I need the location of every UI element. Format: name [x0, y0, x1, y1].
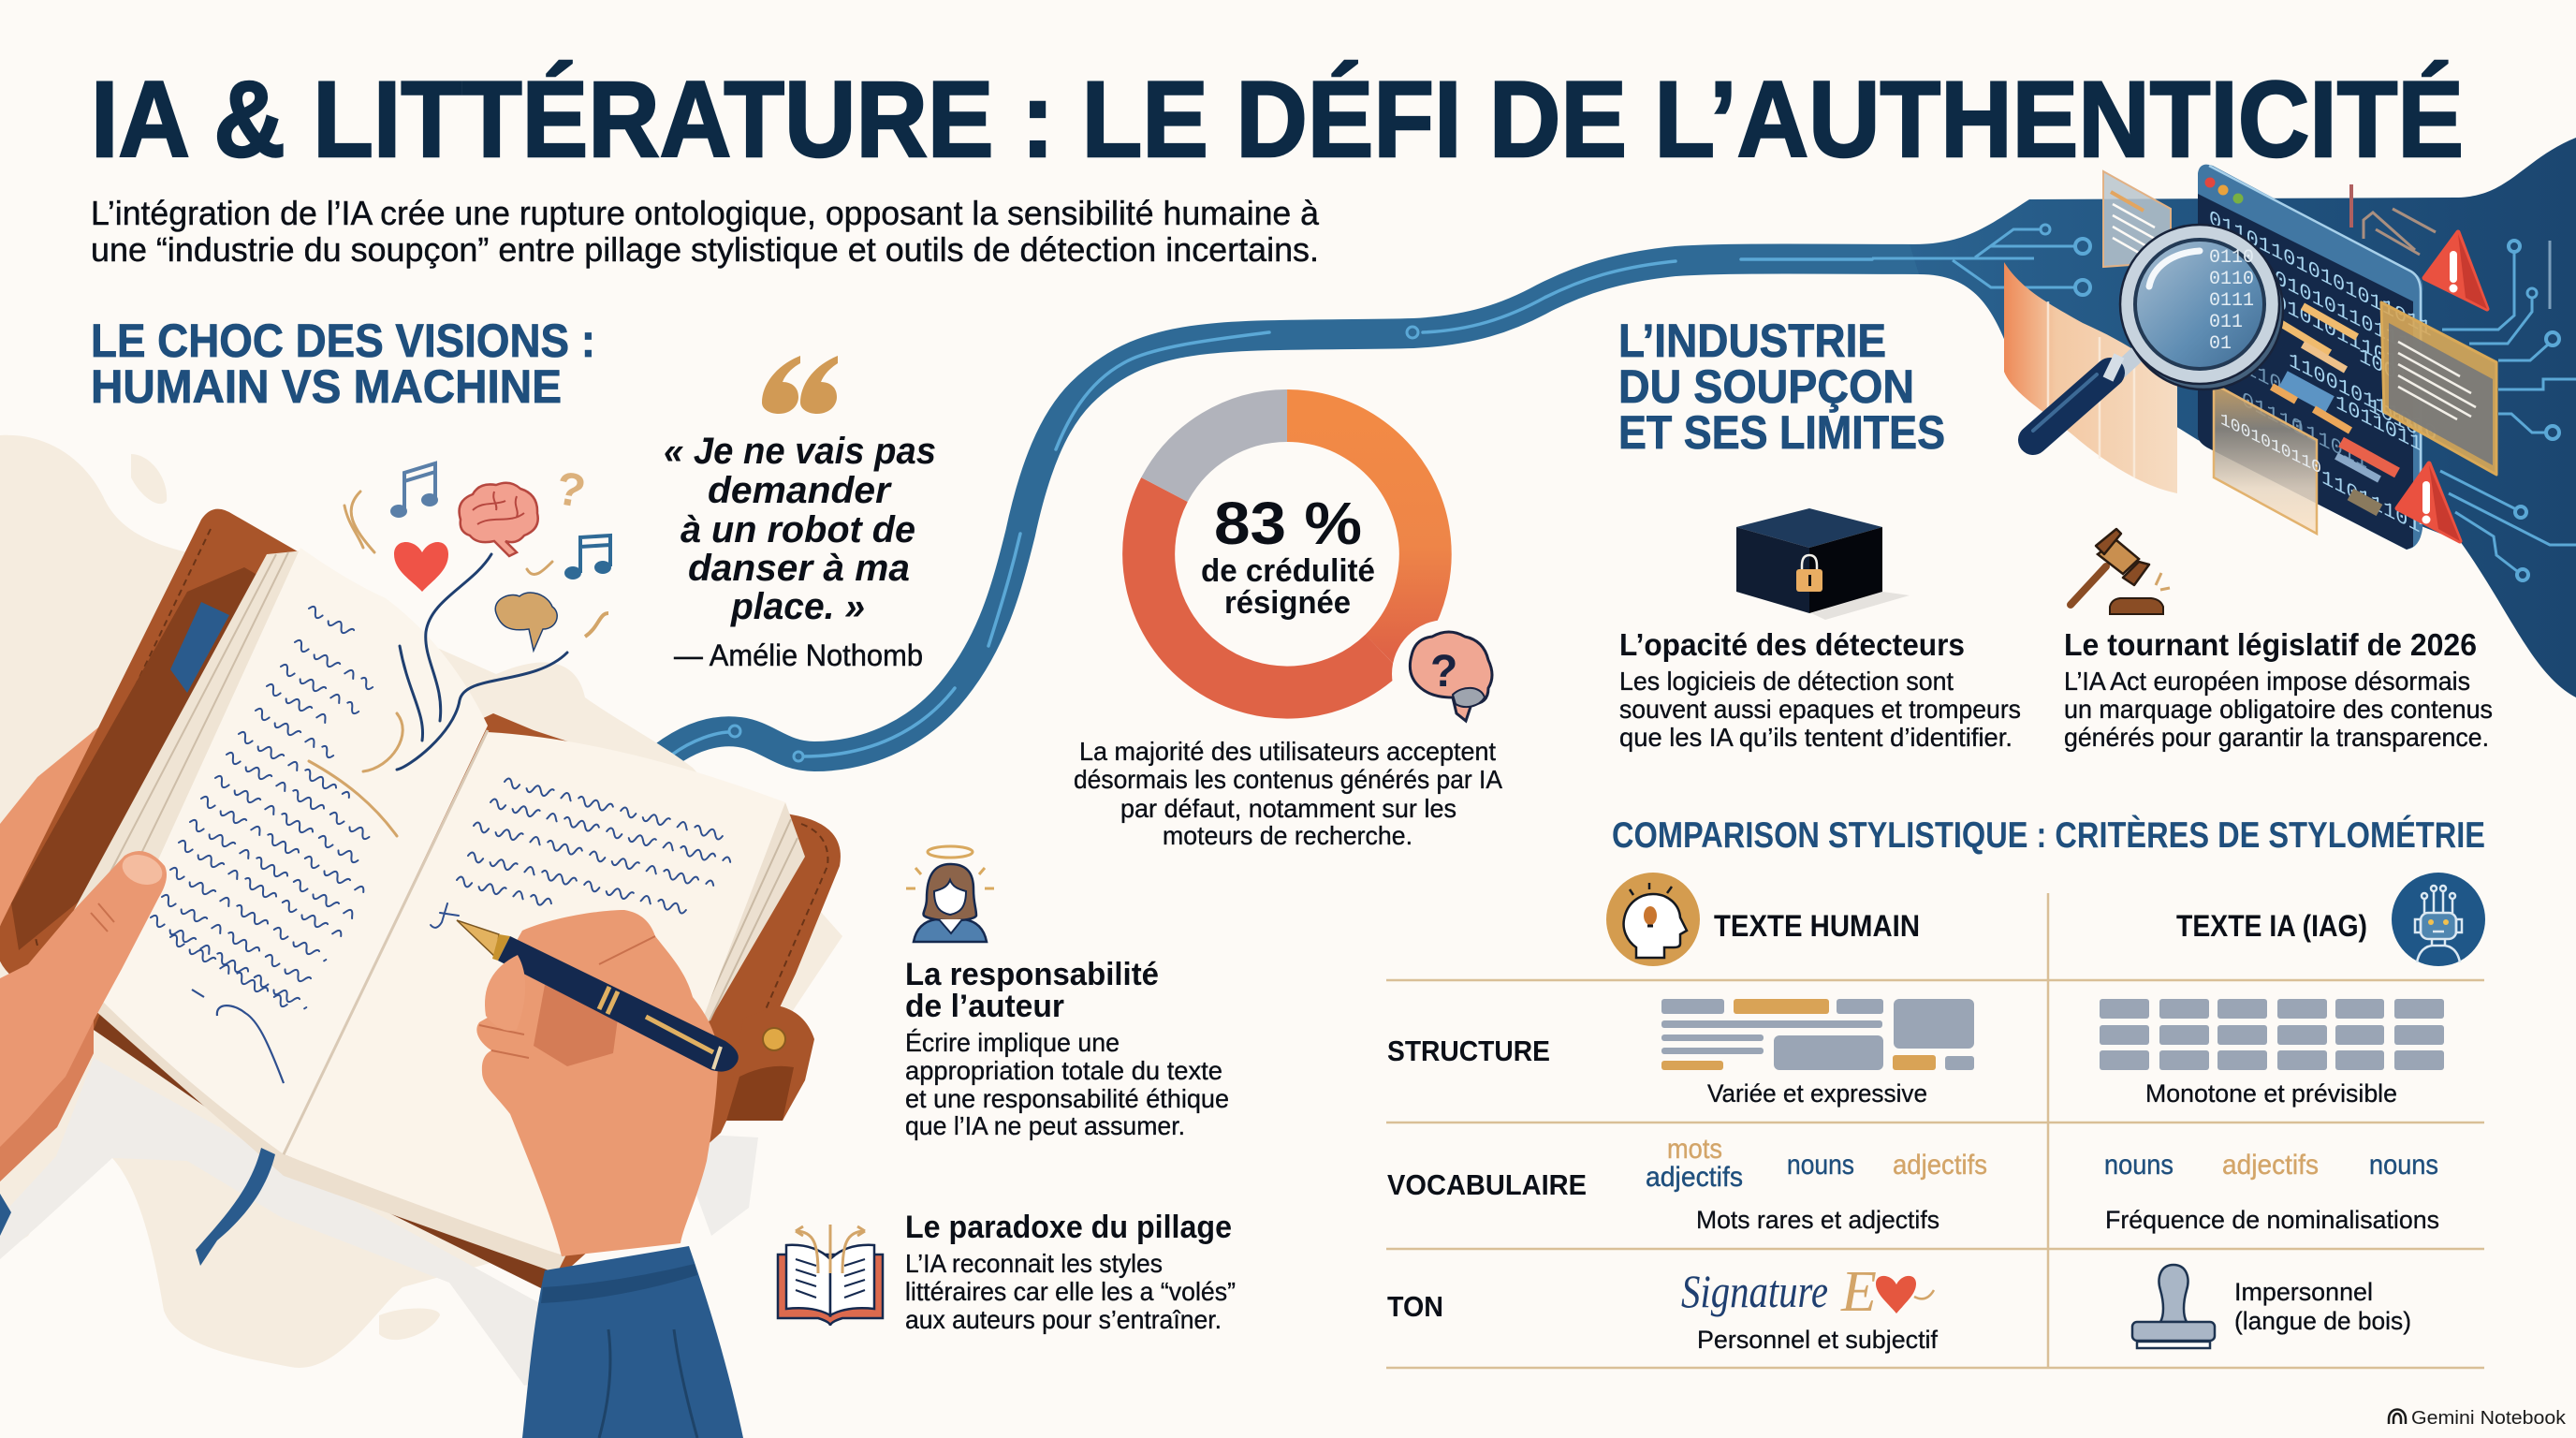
- heading: industrie du soupçon: ET SES LIMITES: [1618, 406, 1945, 459]
- binary code: 111011: [2293, 415, 2367, 476]
- caption: impersonnel: [2234, 1278, 2411, 1335]
- icon: open book with arrows: [778, 1225, 883, 1326]
- magnifying glass: [2033, 225, 2283, 440]
- block: responsabilité de l'auteur: [905, 957, 1229, 1140]
- highlight bars: [2272, 306, 2397, 510]
- block: paradoxe du pillage: Le paradoxe du pillage: [905, 1210, 1232, 1245]
- gold thought cloud: [495, 593, 557, 651]
- illustration: hands writing in a notebook: [0, 435, 842, 1438]
- word row IA: adjectifs: [2222, 1150, 2319, 1181]
- block: tournant législatif: un marquage obligatoire des contenus: [2064, 695, 2493, 724]
- block: responsabilité de l'auteur: appropriation totale du texte: [905, 1056, 1222, 1085]
- connector ribbon: [655, 258, 1956, 763]
- signature on the left page: [192, 990, 284, 1083]
- heading: le choc des visions: HUMAIN VS MACHINE: [91, 360, 562, 413]
- screen: [2198, 165, 2422, 550]
- block: paradoxe du pillage: L’IA reconnait les styles: [905, 1249, 1163, 1278]
- caption: variée: Variée et expressive: [1707, 1079, 1927, 1108]
- caption: mots rares: Mots rares et adjectifs: [1696, 1206, 1939, 1234]
- leather cover: [0, 509, 841, 1290]
- word row IA: [2104, 1150, 2438, 1181]
- comparison table: [1386, 873, 2485, 1368]
- warning icon bottom: [2397, 463, 2460, 541]
- word cloud human: adjectifs: [1893, 1150, 1987, 1181]
- icon: robot: [2392, 873, 2485, 966]
- block: tournant législatif: générés pour garantir la transparence.: [2064, 723, 2489, 752]
- icon: brain with question mark: [1392, 620, 1500, 728]
- binary code: 1001: [2359, 345, 2408, 392]
- donut chart: 83 %: [1149, 416, 1426, 693]
- leather strap: [726, 1005, 814, 1121]
- warning icon top: [2424, 232, 2487, 309]
- circuit traces: [1872, 184, 2576, 580]
- shirt sleeve: [522, 1246, 743, 1438]
- word cloud human: mots: [1667, 1134, 1722, 1165]
- binary code: 1011011: [2335, 391, 2422, 459]
- quote: danser à ma: [688, 548, 910, 589]
- left page: [96, 548, 488, 1154]
- row label: ton: TON: [1387, 1290, 1443, 1323]
- bottom glass panel: 1001010110: [2220, 409, 2321, 479]
- binary code: 01110: [2242, 389, 2304, 443]
- quote: — Amélie Nothomb: [674, 638, 923, 672]
- donut description: La majorité des utilisateurs acceptent: [1079, 737, 1496, 766]
- word cloud human: [1646, 1134, 1987, 1193]
- quote: demander: [708, 470, 892, 511]
- icon: black box with padlock: [1736, 508, 1910, 620]
- heading: le choc des visions: [91, 315, 595, 413]
- block: tournant législatif: L’IA Act européen impose désormais: [2064, 667, 2470, 696]
- word cloud human: nouns: [1787, 1150, 1854, 1181]
- page edges: [74, 550, 304, 992]
- donut description: par défaut, notamment sur les: [1120, 794, 1456, 823]
- block: opacité des détecteurs: que les IA qu’ils tentent d’identifier.: [1619, 723, 2012, 752]
- hand behind the book: [0, 727, 117, 946]
- row label: structure: STRUCTURE: [1387, 1034, 1550, 1067]
- beige blob: [0, 435, 842, 1368]
- block: paradoxe du pillage: [905, 1210, 1236, 1334]
- heading: industrie du soupçon: L’INDUSTRIE: [1618, 315, 1886, 367]
- block: responsabilité de l'auteur: La responsabilité: [905, 957, 1159, 992]
- heading: industrie du soupçon: [1618, 315, 1945, 459]
- binary code: 011011010101011011: [2209, 207, 2432, 344]
- binary code: 110010111010: [2289, 349, 2437, 448]
- caption: impersonnel: Impersonnel: [2234, 1278, 2373, 1306]
- page ribbon: [196, 1148, 275, 1266]
- handwriting left page: [149, 605, 374, 1011]
- magnifying glass: 011: [2209, 312, 2243, 333]
- illustration: detection screen and circuits: [1872, 138, 2576, 697]
- music note right: [566, 536, 610, 578]
- row label: vocabulaire: VOCABULAIRE: [1387, 1168, 1587, 1201]
- right page: [284, 732, 785, 1256]
- intro text: L’intégration de l’IA crée une rupture ontologique, opposant la sensibilité humaine à: [91, 194, 1320, 232]
- question mark: ?: [552, 462, 590, 518]
- quote: à un robot de: [681, 509, 915, 550]
- block: paradoxe du pillage: littéraires car elle les a “volés”: [905, 1277, 1236, 1306]
- caption: personnel: Personnel et subjectif: [1697, 1326, 1938, 1354]
- icon: rubber stamp: [2132, 1265, 2215, 1348]
- block: responsabilité de l'auteur: que l’IA ne peut assumer.: [905, 1111, 1185, 1140]
- word cloud human: adjectifs: [1646, 1162, 1743, 1193]
- signature with heart: [1681, 1260, 1934, 1324]
- binary code: 1101: [2245, 357, 2294, 404]
- varied structure blocks: [1661, 999, 1974, 1070]
- blue circuit background: [1910, 138, 2576, 697]
- caption: nominalisations: Fréquence de nominalisations: [2105, 1206, 2439, 1234]
- gold wisps: [309, 492, 552, 836]
- right glass panel: [2381, 302, 2496, 475]
- block: responsabilité de l'auteur: de l’auteur: [905, 989, 1064, 1024]
- binary code: [2209, 207, 2437, 539]
- donut chart: 83 %: résignée: [1224, 585, 1351, 621]
- binary code: 1010: [2368, 394, 2418, 442]
- icon: gavel: [2071, 529, 2170, 614]
- caption: monotone: Monotone et prévisible: [2145, 1079, 2397, 1108]
- handwriting right page: [431, 778, 731, 928]
- icon: brain with question mark: ?: [1430, 647, 1457, 697]
- orange glass panel: [2004, 262, 2177, 493]
- block: opacité des détecteurs: souvent aussi epaques et trompeurs: [1619, 695, 2021, 724]
- binary code: 01010110111: [2275, 267, 2410, 360]
- document glass panel: [2103, 171, 2171, 267]
- quote: « Je ne vais pas: [664, 431, 936, 472]
- swirl: [585, 613, 608, 637]
- brain icon: [460, 483, 538, 556]
- caption: impersonnel: (langue de bois): [2234, 1307, 2411, 1335]
- heading: le choc des visions: LE CHOC DES VISIONS :: [91, 315, 595, 367]
- icon: author with halo: [906, 846, 994, 942]
- watermark: Gemini Notebook: Gemini Notebook: [2411, 1408, 2567, 1429]
- idea wisps: [397, 554, 567, 770]
- header: texte humain: TEXTE HUMAIN: [1714, 909, 1920, 943]
- block: paradoxe du pillage: aux auteurs pour s’entraîner.: [905, 1305, 1222, 1334]
- right hand: [476, 910, 719, 1256]
- left hand thumb and palm: [0, 851, 167, 1181]
- icon: human head with lightbulb: [1606, 873, 1700, 966]
- bookmark: [170, 602, 229, 693]
- quote: place. »: [730, 586, 865, 627]
- bottom glass panel: [2214, 384, 2321, 534]
- block: tournant législatif: [2064, 627, 2493, 752]
- donut description: [1074, 737, 1502, 850]
- magnifying glass: 0110: [2209, 247, 2254, 269]
- uniform structure grid: [2100, 999, 2444, 1070]
- magnifying glass: 0111: [2209, 290, 2254, 312]
- signature with heart: Signature: [1681, 1265, 1828, 1317]
- block: opacité des détecteurs: Les logicieis de détection sont: [1619, 667, 1954, 696]
- magnifying glass: 0110: [2209, 269, 2254, 290]
- heading: industrie du soupçon: DU SOUPÇON: [1618, 360, 1914, 413]
- donut description: désormais les contenus générés par IA: [1074, 765, 1502, 794]
- fountain pen: [457, 920, 739, 1072]
- signature with heart: E: [1840, 1260, 1877, 1324]
- word row IA: nouns: [2104, 1150, 2174, 1181]
- block: responsabilité de l'auteur: et une responsabilité éthique: [905, 1084, 1229, 1113]
- quote: [664, 431, 936, 672]
- binary code: 0101011101: [2275, 290, 2398, 376]
- index finger over the pen: [485, 955, 525, 1031]
- icon: quotation marks: [762, 356, 838, 414]
- word row IA: nouns: [2369, 1150, 2438, 1181]
- intro text: [91, 194, 1320, 269]
- magnifying glass: 01: [2209, 333, 2232, 355]
- donut chart: 83 %: 83 %: [1214, 490, 1362, 557]
- block: opacité des détecteurs: [1619, 627, 2021, 752]
- donut chart: 83 %: de crédulité: [1201, 553, 1375, 589]
- donut description: moteurs de recherche.: [1163, 821, 1412, 850]
- music note left: [392, 463, 436, 516]
- heart icon: [394, 542, 448, 592]
- block: tournant législatif: Le tournant législatif de 2026: [2064, 627, 2477, 662]
- intro text: une “industrie du soupçon” entre pillage stylistique et outils de détection incertains.: [91, 230, 1319, 269]
- header: texte IA: TEXTE IA (IAG): [2176, 909, 2367, 943]
- block: opacité des détecteurs: L’opacité des détecteurs: [1619, 627, 1965, 662]
- block: responsabilité de l'auteur: Écrire implique une: [905, 1028, 1120, 1057]
- binary code: 11011101: [2321, 466, 2421, 539]
